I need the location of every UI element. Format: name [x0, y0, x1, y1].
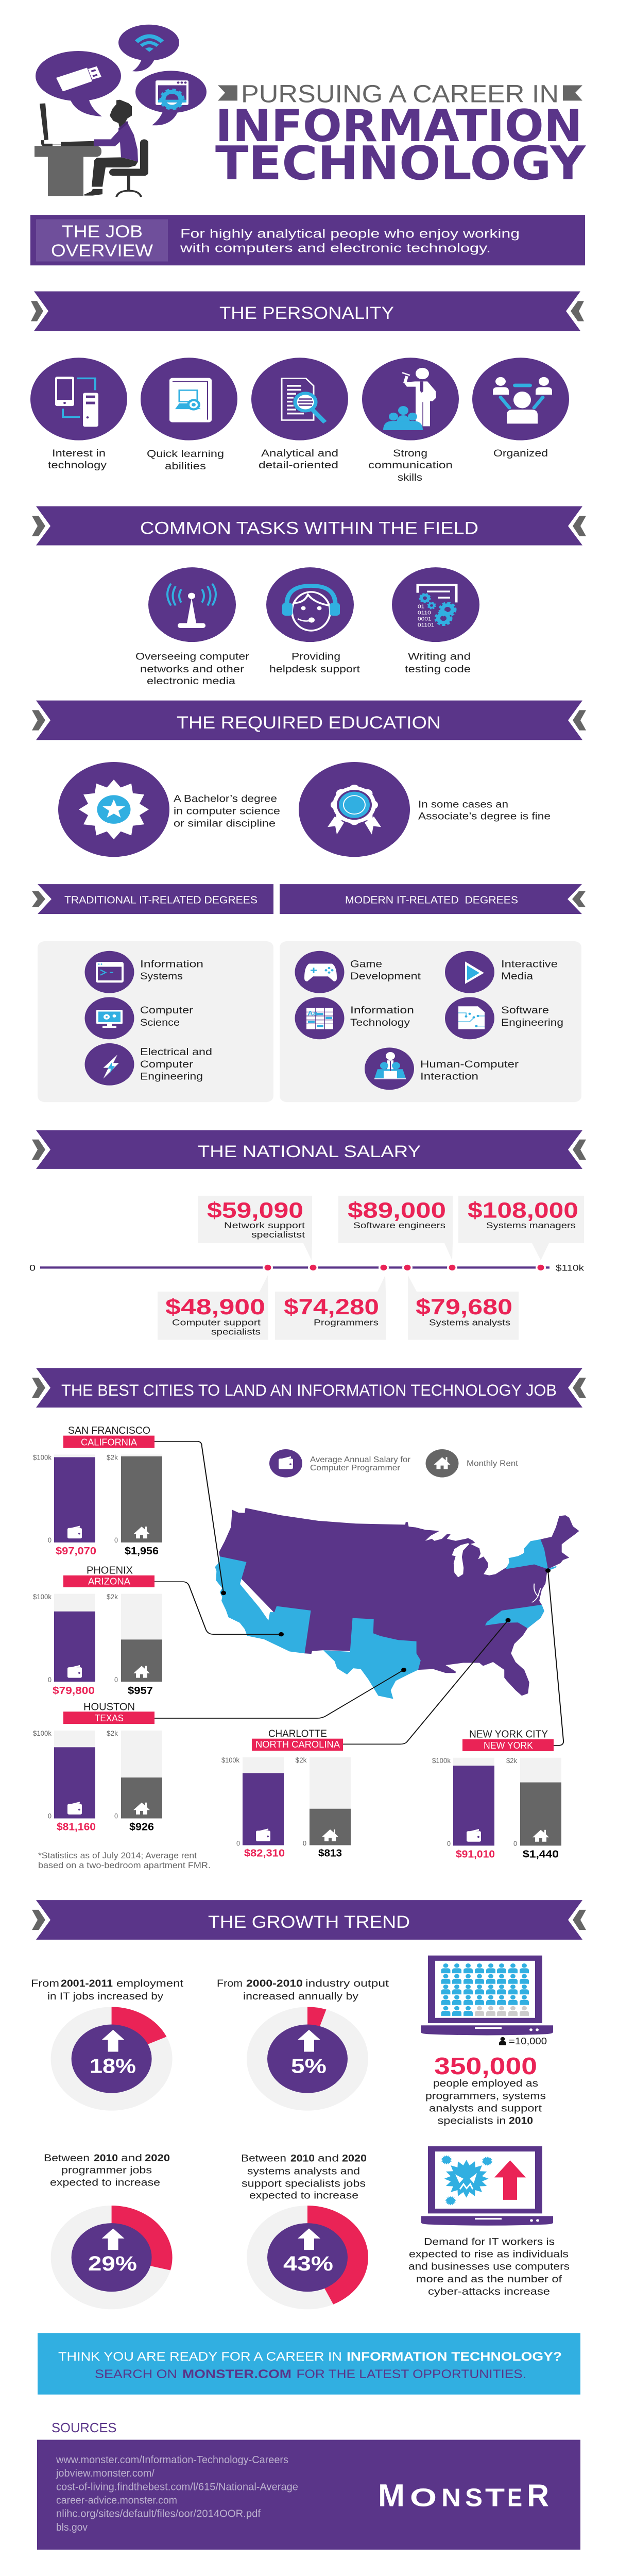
donut chart — [247, 2206, 368, 2309]
heading: traditional degrees: TRADITIONAL IT-RELATED DEGREES — [64, 894, 258, 906]
icon: play button — [445, 951, 494, 993]
bar chart: salary and rent — [432, 1757, 561, 1860]
callout: programmers — [275, 1275, 386, 1340]
stat text: 350,000 people: specialists in — [438, 2115, 506, 2126]
stat: industry output 5 percent: From — [217, 1978, 243, 1989]
panel: San Francisco: CALIFORNIA — [81, 1437, 137, 1448]
text: source list: cost-of-living.findthebest.com/l/615/National-Average — [56, 2481, 298, 2493]
icon: rosette — [299, 762, 410, 857]
stat text: 350,000 people: analysts and support — [429, 2103, 542, 2114]
bar chart: salary and rent: $2k — [107, 1454, 118, 1462]
text: modern degree names: Interactive — [501, 958, 558, 970]
panel: Houston — [33, 1701, 162, 1833]
icon: badge with star — [58, 762, 169, 857]
text: source list — [56, 2453, 298, 2533]
text: trait labels: Quick learning — [147, 448, 224, 460]
icon: terminal window — [84, 951, 134, 993]
bar chart: salary and rent: $91,010 — [456, 1848, 495, 1860]
bar chart: salary and rent: $100k — [221, 1757, 239, 1765]
title — [215, 81, 587, 191]
text: trait labels: technology — [48, 460, 107, 471]
text: demand for IT workers: more and as the number of — [416, 2274, 562, 2285]
chair — [109, 139, 148, 197]
heading: national salary: THE NATIONAL SALARY — [198, 1142, 421, 1161]
stat: analysts and support jobs 43 percent: support specialists jobs — [242, 2178, 366, 2189]
bar chart: salary and rent: $97,070 — [56, 1545, 96, 1556]
icon: monitor with gears — [84, 997, 134, 1039]
panel: Charlotte — [221, 1727, 351, 1859]
stat text: 350,000 people: 350,000 — [434, 2053, 537, 2079]
bar chart: salary and rent: $82,310 — [244, 1847, 285, 1859]
footnote: based on a two-bedroom apartment FMR. — [38, 1860, 211, 1870]
panel: Houston: HOUSTON — [83, 1701, 135, 1713]
map: United States with highlighted states — [215, 1508, 579, 1699]
donut chart — [51, 2206, 173, 2309]
text: traditional degree names: Computer — [140, 1004, 193, 1015]
text: associate's degree: Associate’s degree is fine — [418, 810, 551, 822]
callout: software engineers: Software engineers — [353, 1220, 445, 1230]
callout: call to action — [38, 2333, 580, 2395]
stat: IT jobs 18 percent: 2001-2011 — [61, 1978, 113, 1989]
icon: antenna — [148, 567, 236, 642]
donut chart — [51, 2007, 173, 2111]
panel: laptop with people count — [421, 1956, 553, 2126]
stat: programmer jobs 29 percent: and — [121, 2152, 142, 2163]
text: trait labels: skills — [398, 472, 422, 483]
callout: call to action: INFORMATION TECHNOLOGY? — [347, 2349, 562, 2364]
text: traditional degree names: Electrical and — [140, 1046, 212, 1058]
callout: network support specialists: Network support — [224, 1220, 305, 1230]
text: task labels — [135, 651, 471, 687]
desk — [35, 146, 101, 196]
logo: Monster: O — [410, 2483, 437, 2512]
heading: national salary — [32, 1130, 586, 1169]
bar chart: salary and rent: $926 — [129, 1821, 154, 1833]
Texas — [323, 1618, 421, 1699]
panel: job overview — [30, 215, 585, 265]
text: trait labels: abilities — [165, 461, 206, 472]
bar chart: salary and rent: $100k — [33, 1730, 52, 1738]
text: demand for IT workers — [408, 2236, 570, 2297]
panel: New York City — [432, 1728, 561, 1860]
icon: data table — [295, 997, 344, 1039]
text: traditional degree names: Engineering — [140, 1071, 203, 1082]
heading: best cities — [32, 1368, 586, 1408]
icon: code and gears: 0110 — [418, 610, 431, 616]
stat: analysts and support jobs 43 percent: Between — [241, 2153, 286, 2164]
text: source list: career-advice.monster.com — [56, 2494, 177, 2506]
panel: San Francisco — [33, 1425, 162, 1556]
stat: industry output 5 percent: 2000-2010 — [246, 1978, 303, 1989]
stat: programmer jobs 29 percent: programmer jobs — [61, 2164, 152, 2176]
text: source list: www.monster.com/Information-Technology-Careers — [56, 2453, 288, 2465]
text: source list: nlihc.org/sites/default/files/oor/2014OOR.pdf — [56, 2507, 261, 2519]
callout: systems managers — [458, 1196, 584, 1260]
stat text: 350,000 people: people employed as — [433, 2077, 538, 2089]
text: modern degree names: Development — [350, 971, 421, 982]
bar chart: salary and rent: 0 — [447, 1840, 451, 1848]
stat: IT jobs 18 percent: From — [31, 1978, 59, 1989]
bar chart: salary and rent: 0 — [303, 1840, 306, 1848]
stat: programmer jobs 29 percent — [44, 2152, 173, 2309]
bar chart: salary and rent: 0 — [236, 1840, 240, 1848]
bar chart: salary and rent: $2k — [296, 1757, 307, 1765]
stat: programmer jobs 29 percent: Between — [44, 2152, 90, 2163]
callout: call to action: SEARCH ON — [95, 2367, 177, 2381]
stat: analysts and support jobs 43 percent: 2010 — [290, 2153, 315, 2164]
New York — [506, 1539, 548, 1569]
text: demand for IT workers: Demand for IT workers is — [424, 2236, 555, 2247]
panel: San Francisco: SAN FRANCISCO — [68, 1425, 150, 1436]
callout: call to action: THINK YOU ARE READY FOR A CAREER IN — [58, 2349, 342, 2364]
North Carolina — [485, 1605, 544, 1628]
stat: programmer jobs 29 percent: 2020 — [145, 2152, 170, 2163]
title: PURSUING A CAREER IN — [241, 81, 559, 108]
bar chart: salary and rent: $2k — [107, 1594, 118, 1601]
bar chart: salary and rent: 0 — [48, 1537, 52, 1545]
icon: human computer interaction — [365, 1047, 414, 1090]
panel: Charlotte: CHARLOTTE — [268, 1727, 327, 1739]
text: task labels: networks and other — [140, 664, 244, 675]
title: TECHNOLOGY — [215, 137, 587, 191]
legend: salary and rent: Average Annual Salary for — [310, 1455, 410, 1464]
heading: common tasks: COMMON TASKS WITHIN THE FIELD — [140, 518, 478, 538]
donut chart — [247, 2007, 368, 2111]
icon: quick learning — [141, 358, 237, 440]
bar chart: salary and rent: $957 — [128, 1685, 153, 1697]
text: modern degree names: Game — [350, 958, 382, 970]
bar chart: salary and rent — [33, 1594, 162, 1697]
stat: analysts and support jobs 43 percent: systems analysts and — [247, 2165, 360, 2177]
text: modern degree names: Human-Computer — [420, 1058, 519, 1070]
bar chart: salary and rent: 0 — [48, 1676, 52, 1684]
text: trait labels: Analytical and — [261, 448, 338, 459]
bar chart: salary and rent: 0 — [114, 1676, 118, 1684]
text: modern degree names: Interaction — [420, 1071, 478, 1082]
stat: industry output 5 percent — [217, 1978, 389, 2111]
icon: interest in technology — [30, 358, 127, 440]
panel: Houston: TEXAS — [95, 1713, 124, 1724]
text: modern degree names: Media — [501, 971, 533, 982]
panel: job overview: OVERVIEW — [51, 241, 153, 260]
text: task labels: Overseeing computer — [135, 651, 249, 662]
icon: organized — [472, 358, 569, 440]
stat text: 350,000 people: programmers, systems — [425, 2090, 546, 2102]
callout: computer support specialists: specialists — [211, 1327, 261, 1336]
text: associate's degree: In some cases an — [418, 799, 508, 810]
footnote: *Statistics as of July 2014; Average rent — [38, 1851, 197, 1860]
text: demand for IT workers: and businesses use computers — [408, 2261, 570, 2272]
stat text: 350,000 people — [425, 2053, 546, 2126]
chart: salary scale — [29, 1196, 585, 1340]
logo: Monster: R — [527, 2478, 549, 2513]
text: modern degree names: Information — [350, 1004, 414, 1015]
logo: Monster: M — [378, 2478, 405, 2513]
logo: Monster — [378, 2478, 549, 2513]
bar chart: salary and rent: $1,956 — [125, 1545, 159, 1556]
text: modern degree names: Technology — [350, 1016, 410, 1028]
bar chart: salary and rent: 0 — [513, 1840, 517, 1848]
text: modern degree names: Software — [501, 1004, 549, 1015]
text: task labels: electronic media — [147, 675, 235, 687]
stat: IT jobs 18 percent — [31, 1978, 183, 2111]
stat: IT jobs 18 percent: employment — [116, 1978, 183, 1989]
pictogram: people grid — [441, 1963, 529, 2016]
heading: traditional degrees — [32, 884, 273, 914]
icon: headset — [266, 567, 354, 642]
text: modern degree names — [350, 958, 563, 1082]
panel: traditional degrees — [38, 941, 273, 1102]
text: source list: jobview.monster.com/ — [56, 2467, 155, 2479]
illustration: person at computer with thought bubbles — [35, 25, 207, 197]
icon: wifi speech bubble — [118, 25, 179, 72]
callout: computer support specialists: Computer support — [172, 1317, 261, 1327]
donut chart: 5% — [291, 2055, 327, 2078]
California and Arizona — [215, 1556, 311, 1653]
stat: analysts and support jobs 43 percent: expected to increase — [249, 2190, 358, 2201]
title: INFORMATION — [215, 100, 582, 151]
heading: sources: SOURCES — [52, 2420, 117, 2435]
legend: salary and rent: Monthly Rent — [467, 1459, 518, 1468]
icon: code and gears: 01 — [418, 604, 424, 609]
text: bachelor's degree: in computer science — [174, 805, 280, 817]
text: modern degree names: Engineering — [501, 1016, 563, 1028]
bar chart: salary and rent: $100k — [33, 1454, 52, 1462]
text: associate's degree — [418, 799, 551, 822]
callout: call to action: MONSTER.COM — [182, 2367, 291, 2381]
stat: IT jobs 18 percent: in IT jobs increased by — [47, 1990, 163, 2002]
logo: Monster: S — [465, 2483, 483, 2512]
panel: New York City: NEW YORK CITY — [469, 1728, 548, 1740]
text: task labels: helpdesk support — [269, 664, 360, 675]
text: bachelor's degree — [174, 793, 280, 829]
text: task labels: Writing and — [408, 651, 471, 662]
callout: programmers: $74,280 — [284, 1295, 379, 1319]
text: task labels: testing code — [405, 664, 471, 675]
stat text: 350,000 people: 2010 — [509, 2115, 533, 2126]
callout: computer support specialists: $48,900 — [165, 1295, 265, 1319]
bar chart: salary and rent — [221, 1757, 351, 1859]
bar chart: salary and rent — [33, 1730, 162, 1833]
axis line with markers — [29, 1263, 585, 1273]
bar chart: salary and rent: $813 — [318, 1847, 342, 1859]
stat: programmer jobs 29 percent: expected to increase — [50, 2177, 160, 2188]
legend: person equals 10,000: =10,000 — [509, 2036, 547, 2047]
icon: lightning bolt — [84, 1043, 134, 1086]
icon: laptop — [421, 1956, 553, 2035]
bar chart: salary and rent: 0 — [48, 1812, 52, 1820]
icon: code and gears — [392, 567, 479, 642]
text: traditional degree names: Computer — [140, 1058, 193, 1070]
text: trait labels: Strong — [393, 448, 427, 459]
heading: the personality — [31, 292, 584, 331]
heading: required education — [32, 701, 586, 740]
stat: analysts and support jobs 43 percent — [241, 2153, 368, 2309]
callout: systems analysts: $79,680 — [416, 1295, 512, 1319]
panel: common tasks — [135, 567, 479, 687]
text: demand for IT workers: expected to rise as individuals — [409, 2248, 569, 2260]
callout: systems managers: $108,000 — [468, 1198, 578, 1223]
callout: network support specialists: specialistst — [251, 1229, 305, 1240]
callout: software engineers — [338, 1196, 453, 1260]
callout: systems analysts: Systems analysts — [429, 1317, 510, 1327]
icon: app window bubble — [135, 71, 207, 125]
callout: computer support specialists — [158, 1275, 268, 1340]
callout: programmers: Programmers — [314, 1317, 379, 1327]
footnote — [38, 1851, 211, 1870]
bar chart: salary and rent: $81,160 — [57, 1821, 96, 1833]
panel: modern degrees — [280, 941, 581, 1102]
heading: growth trend: THE GROWTH TREND — [208, 1912, 410, 1931]
text: traditional degree names: Information — [140, 958, 203, 970]
text: task labels: Providing — [291, 651, 340, 662]
axis line with markers: $110k — [556, 1263, 585, 1273]
heading: common tasks — [32, 506, 586, 546]
panel: Phoenix — [33, 1564, 162, 1697]
ribbon ends — [218, 85, 582, 100]
stat: programmer jobs 29 percent: 2010 — [94, 2152, 118, 2163]
stat: industry output 5 percent: increased annually by — [243, 1990, 358, 2002]
callout: call to action: FOR THE LATEST OPPORTUNITIES. — [297, 2367, 526, 2381]
icon: communication — [362, 358, 459, 440]
panel: personality traits — [30, 358, 569, 483]
heading: modern degrees — [280, 884, 586, 914]
heading: modern degrees: MODERN IT-RELATED DEGREES — [345, 894, 518, 906]
arrow: rising threat — [494, 2160, 526, 2200]
heading: the personality: THE PERSONALITY — [219, 303, 394, 323]
stat: analysts and support jobs 43 percent: and — [318, 2153, 339, 2164]
bar chart: salary and rent: 0 — [114, 1812, 118, 1820]
legend: salary and rent — [269, 1449, 518, 1478]
callout: network support specialists — [198, 1196, 312, 1260]
bar chart: salary and rent: $79,800 — [53, 1685, 95, 1697]
text: trait labels: communication — [368, 460, 453, 471]
panel: job overview: with computers and electronic technology. — [180, 241, 491, 255]
callout: network support specialists: $59,090 — [207, 1198, 303, 1223]
icon: USB bubble — [36, 51, 121, 116]
callout: systems managers: Systems managers — [486, 1220, 576, 1230]
stat: analysts and support jobs 43 percent: 2020 — [342, 2153, 367, 2164]
bar chart: salary and rent: $100k — [432, 1757, 451, 1765]
icon: code and gears: 0001 — [418, 616, 432, 622]
bar chart: salary and rent: $2k — [107, 1730, 118, 1738]
text: trait labels: detail-oriented — [259, 460, 338, 471]
icon: code and gears: 01101 — [418, 622, 434, 628]
donut chart: 18% — [90, 2055, 136, 2078]
icon: analytical — [251, 358, 348, 440]
icon: data table: Aa — [307, 1009, 317, 1017]
person — [83, 100, 138, 196]
text: bachelor's degree: or similar discipline — [174, 818, 276, 829]
icon: laptop — [421, 2146, 553, 2226]
icon: software circuit page — [445, 997, 494, 1039]
heading: growth trend — [32, 1900, 586, 1940]
text: trait labels: Interest in — [52, 448, 106, 459]
panel: job overview: For highly analytical people who enjoy working — [180, 226, 520, 241]
bar chart: salary and rent — [33, 1454, 162, 1556]
text: trait labels — [48, 448, 548, 483]
bar chart: salary and rent: 0 — [114, 1537, 118, 1545]
callout: systems analysts — [408, 1275, 519, 1340]
donut chart: 43% — [283, 2252, 333, 2275]
panel: job overview: THE JOB — [62, 222, 143, 241]
panel: New York City: NEW YORK — [484, 1740, 533, 1751]
logo: Monster: E — [507, 2483, 522, 2512]
stat: industry output 5 percent: industry output — [305, 1978, 389, 1989]
bar chart: salary and rent: $2k — [506, 1757, 517, 1765]
text: traditional degree names — [140, 958, 212, 1082]
panel: cyber attacks laptop — [408, 2146, 570, 2297]
logo: Monster: T — [485, 2483, 505, 2512]
donut chart: 29% — [88, 2252, 137, 2275]
computer monitor and keyboard — [40, 103, 94, 146]
text: traditional degree names: Systems — [140, 971, 183, 982]
legend: salary and rent: Computer Programmer — [310, 1463, 400, 1472]
icon: game controller — [295, 951, 344, 993]
panel: Phoenix: ARIZONA — [88, 1576, 130, 1587]
logo: Monster: N — [441, 2483, 461, 2512]
axis line with markers: 0 — [29, 1263, 36, 1273]
text: trait labels: Organized — [493, 448, 548, 459]
panel: Phoenix: PHOENIX — [87, 1564, 133, 1576]
text: source list: bls.gov — [56, 2521, 88, 2533]
bar chart: salary and rent: $1,440 — [523, 1848, 559, 1860]
heading: required education: THE REQUIRED EDUCATION — [177, 713, 441, 733]
connector lines from cities to map — [154, 1442, 563, 1745]
panel: degree requirement — [58, 762, 551, 857]
text: bachelor's degree: A Bachelor’s degree — [174, 793, 277, 804]
panel: sources and logo — [37, 2440, 580, 2550]
icon: viruses — [441, 2155, 493, 2206]
text: traditional degree names: Science — [140, 1016, 180, 1028]
callout: software engineers: $89,000 — [348, 1198, 446, 1223]
bar chart: salary and rent: $100k — [33, 1594, 52, 1601]
text: demand for IT workers: cyber-attacks increase — [428, 2286, 550, 2297]
panel: Charlotte: NORTH CAROLINA — [255, 1739, 340, 1750]
